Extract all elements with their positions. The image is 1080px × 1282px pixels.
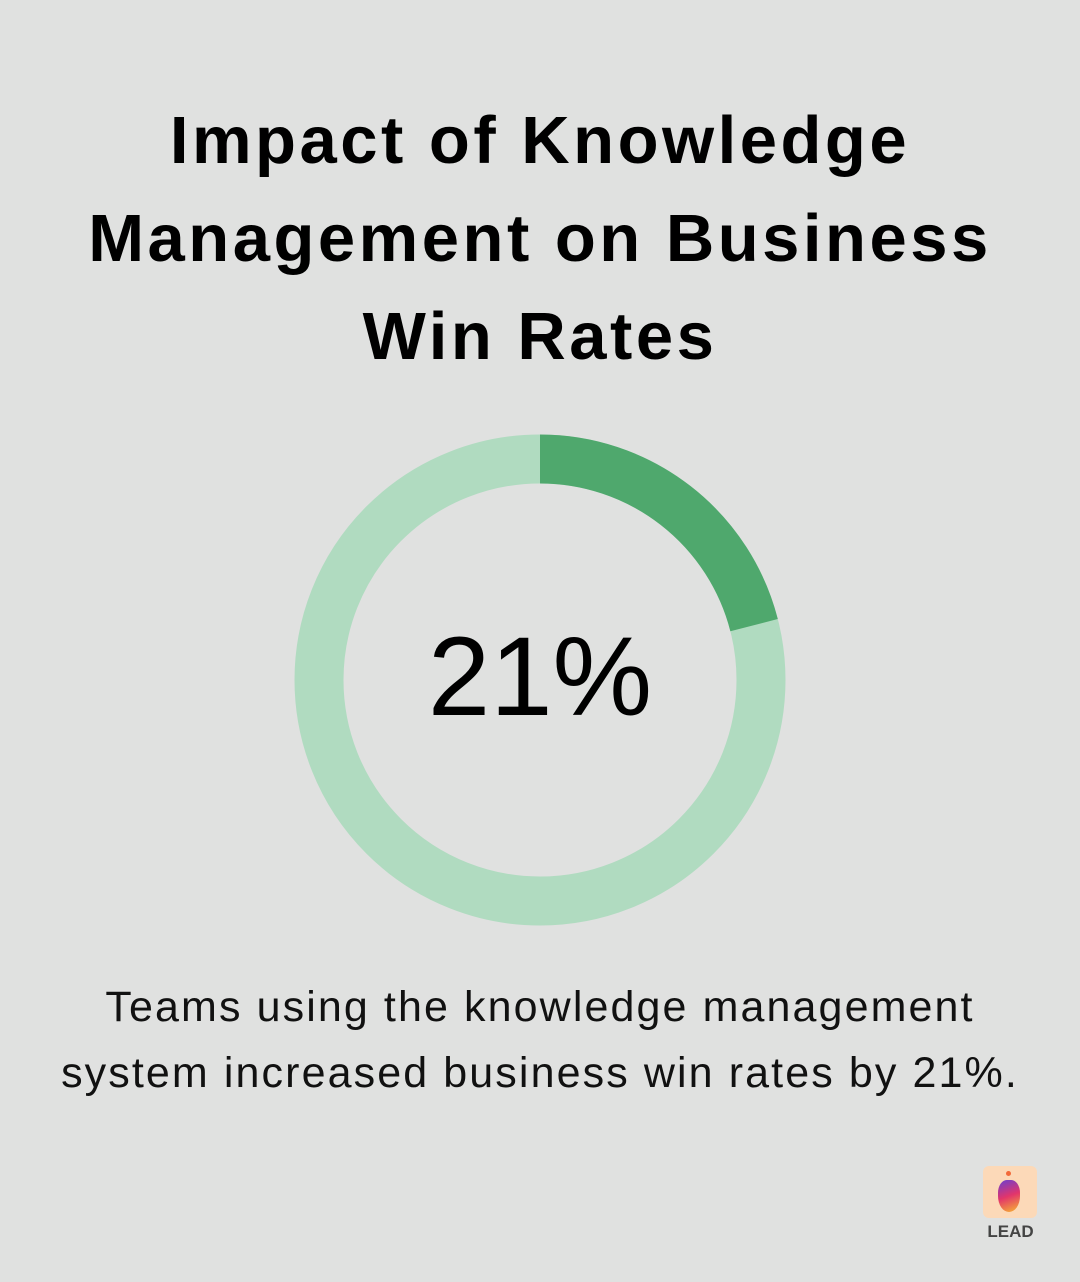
title: Win Rates	[363, 299, 717, 374]
logo	[983, 1166, 1037, 1241]
title: Management on Business	[88, 201, 992, 276]
title	[88, 103, 992, 374]
title: Impact of Knowledge	[170, 103, 910, 178]
description	[61, 983, 1019, 1097]
logo: LEAD	[987, 1222, 1034, 1241]
description: system increased business win rates by 21%.	[61, 1049, 1019, 1097]
description: Teams using the knowledge management	[105, 983, 975, 1031]
donut chart: 21%	[428, 614, 652, 739]
donut chart	[294, 434, 786, 926]
